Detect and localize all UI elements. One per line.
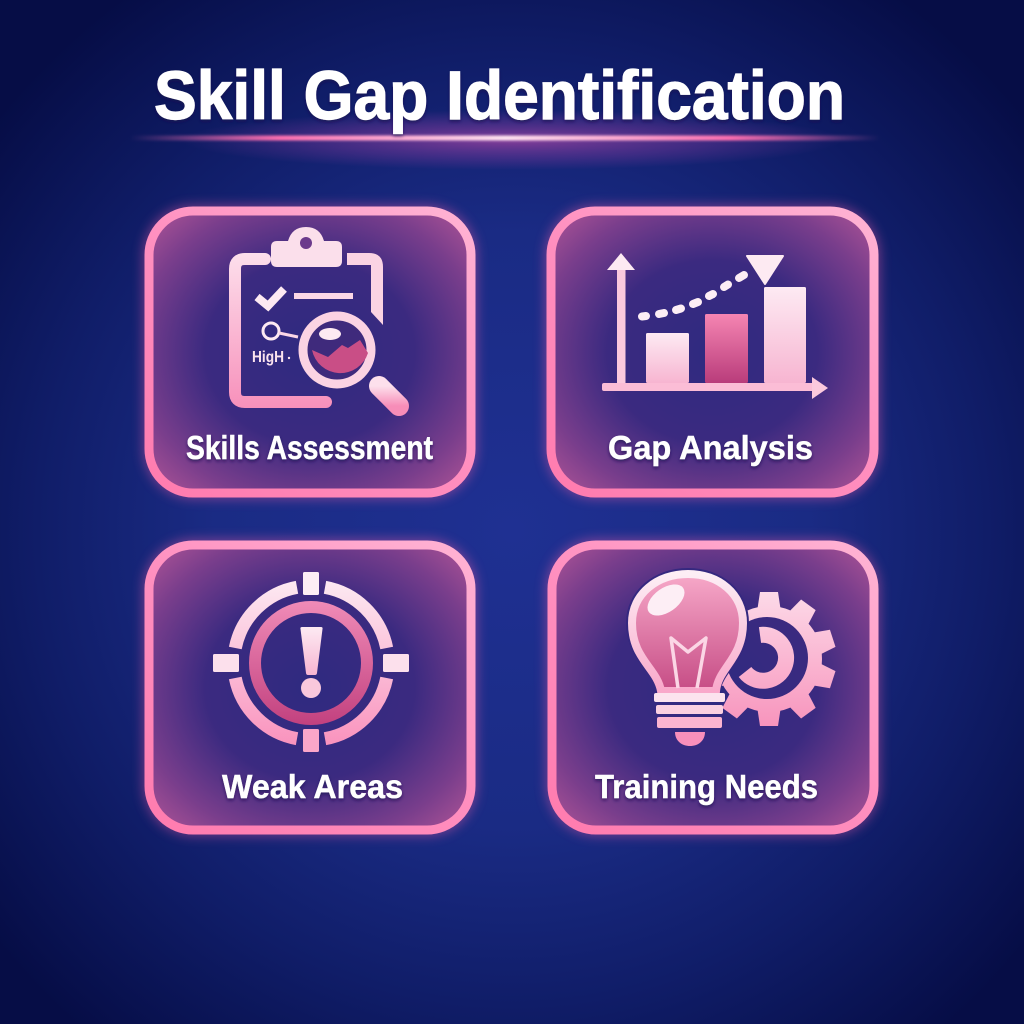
panel: weak areas (149, 545, 471, 830)
icon: clipboard with magnifier (235, 227, 399, 406)
card glow (551, 211, 874, 493)
panel: gap analysis (551, 211, 874, 493)
card glow (149, 211, 471, 493)
panel: training needs (552, 545, 874, 830)
panel: skills assessment (149, 211, 471, 493)
icon: light bulb and gear (628, 570, 850, 746)
bulb (628, 570, 747, 746)
label: Training Needs (595, 768, 818, 805)
card fill and border (149, 545, 471, 830)
glowing title underline (130, 110, 880, 170)
card glow (149, 545, 471, 830)
card fill and border (551, 211, 874, 493)
label: Skills Assessment (186, 429, 433, 466)
title: Skill Gap Identification (154, 57, 845, 134)
card glow (552, 545, 874, 830)
icon: bar chart with dashed trend (602, 253, 828, 399)
gear (722, 592, 836, 726)
card fill and border (552, 545, 874, 830)
label: Weak Areas (222, 768, 403, 805)
label: Gap Analysis (608, 429, 813, 466)
icon: target with exclamation (213, 572, 409, 752)
icon: clipboard with magnifier: HigH (252, 349, 284, 366)
card fill and border (149, 211, 471, 493)
